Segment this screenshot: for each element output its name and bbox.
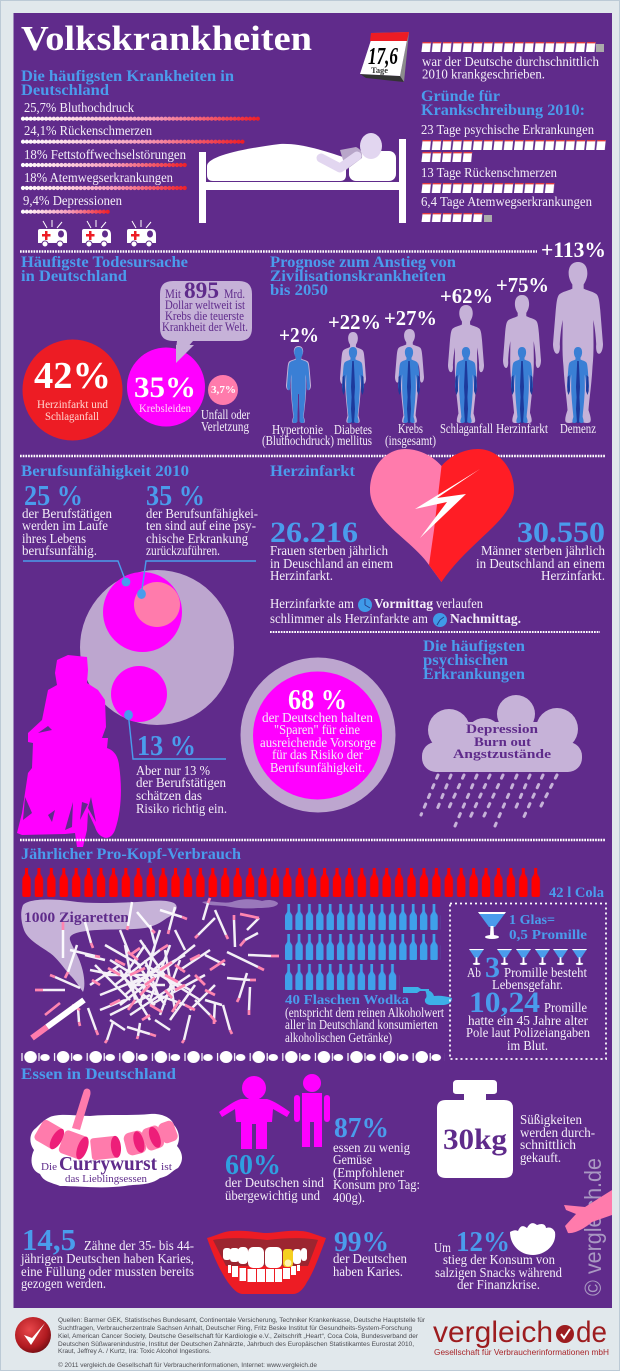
chart: vodka bottles: aller in Deutschland konsumierten [285, 1017, 438, 1032]
text: one glass: 0,5 Promille [509, 927, 587, 942]
text: sweets: Süßigkeiten [520, 1112, 582, 1127]
bar: Depressionen: 9,4% Depressionen [23, 193, 122, 208]
stat: 13 %: Aber nur 13 % [136, 763, 210, 778]
stat: 12% [434, 1226, 562, 1292]
stat: 35 % [146, 481, 258, 558]
circle: 3,7%: Unfall oder [201, 407, 250, 422]
figure: Krebs +27%: +27% [384, 306, 437, 330]
heading [21, 68, 234, 99]
panel: mental illness [421, 638, 582, 826]
text: 10,24 promille: Pole laut Polizeiangaben [466, 1025, 590, 1040]
panel: annual consumption [21, 846, 606, 1059]
stat: 60%: der Deutschen sind [225, 1175, 324, 1190]
stat: 87%: 87% [334, 1112, 389, 1144]
text: 3 promille: Promille besteht [504, 965, 587, 980]
text: morning and afternoon: verlaufen [436, 596, 483, 611]
text: sweets: schnittlich [520, 1137, 576, 1152]
stat: 60% [225, 1149, 324, 1203]
text: sick days: war der Deutsche durchschnittlich [422, 54, 599, 69]
icon: broken heart [370, 449, 514, 582]
icon: cloud: Depression [466, 721, 539, 736]
heading: reasons [421, 88, 585, 119]
stat: 12%: der Finanzkrise. [457, 1277, 540, 1292]
icon: calendar 17,6 Tage: Tage [371, 66, 388, 75]
stat: 14,5 teeth [20, 1222, 194, 1291]
figure: Diabetes +22%: +22% [328, 310, 381, 334]
icon: currywurst [30, 1088, 182, 1187]
circle: 68 %: "Sparen" für eine [274, 722, 360, 737]
stat: 30.550: in Deutschland an einem [476, 556, 606, 571]
circle: 35% [127, 345, 205, 426]
stat: 87%: (Empfohlener [333, 1165, 405, 1180]
figure: Schlaganfall +62%: +62% [440, 284, 493, 308]
text: sick days [422, 54, 599, 82]
circle: 68 %: für das Risiko der [272, 747, 364, 762]
stat: 13 %: der Berufstätigen [136, 775, 226, 790]
stat: 35 %: der Berufsunfähigkei- [146, 506, 258, 521]
circle: 68 % [240, 658, 396, 812]
icon: hand [564, 1190, 612, 1233]
icon: mouth [207, 1231, 326, 1294]
stat: 25 %: werden im Laufe [22, 518, 108, 533]
figure: Diabetes +22% [328, 310, 381, 448]
heading: Jährlicher Pro-Kopf-Verbrauch [21, 846, 241, 863]
logo: de [576, 1316, 607, 1349]
stat: 14,5 teeth: eine Füllung oder mussten bereits [21, 1264, 194, 1279]
reason: psychische Erkrankungen [421, 122, 606, 162]
stat: 35 %: zurückzuführen. [146, 543, 220, 558]
callout: 895 Mrd.: Krebs die teuerste [165, 309, 244, 323]
text: morning and afternoon: Vormittag [374, 596, 433, 611]
text: morning and afternoon: Herzinfarkte am [270, 596, 355, 611]
stat: 12%: 12% [456, 1226, 510, 1258]
stat: 25 %: ihres Lebens [22, 531, 86, 546]
text: 3 promille: Ab [467, 965, 481, 980]
panel: food in Germany [20, 1066, 612, 1296]
chart: nested ellipses [23, 561, 256, 759]
heading: Berufsunfähigkeit 2010 [21, 463, 189, 480]
icon: person in bed [199, 133, 406, 223]
icon: cloud: Angstzustände [453, 746, 551, 761]
icon: check seal [15, 1317, 51, 1353]
figure: Schlaganfall +62% [440, 284, 493, 436]
callout: 895 Mrd.: Mrd. [224, 287, 245, 301]
panel: forecast 2050 [262, 237, 606, 448]
stat: 87%: Konsum pro Tag: [333, 1177, 420, 1192]
stat: 14,5 teeth: 14,5 [22, 1222, 76, 1257]
stat: 26.216: Frauen sterben jährlich [270, 543, 388, 558]
heading: reasons: Krankschreibung 2010: [421, 102, 585, 119]
stat: 99%: der Deutschen [333, 1251, 407, 1266]
icon: large glass [478, 912, 506, 939]
panel: heart attack [270, 449, 606, 627]
chart: cola bottles [22, 868, 604, 901]
circle: 3,7% [201, 375, 250, 434]
text: morning and afternoon: schlimmer als Herzinfarkte am [270, 611, 429, 626]
icon: currywurst: das Lieblingsessen [65, 1173, 147, 1185]
heading: Erkrankungen [423, 666, 525, 683]
circle: 42%: Herzinfarkt und [37, 397, 108, 411]
callout: 895 Mrd.: 895 [184, 278, 219, 303]
chart: cola bottles: 42 l Cola [549, 885, 604, 901]
stat: 13 %: 13 % [137, 731, 196, 762]
stat: 25 %: berufsunfähig. [22, 543, 97, 558]
footer [15, 1316, 609, 1369]
bar: Fettstoffwechselstörungen: 18% Fettstoffwechselstörungen [24, 147, 186, 162]
icon: calendar 17,6 Tage: 17,6 [368, 44, 398, 70]
circle: 3,7%: 3,7% [211, 384, 236, 396]
sources: Kiel, American Cancer Society, Deutsche Gesellschaft für Kardiologie e.V., Zeitschrift „Heart“, Coca Cola, Bundesverband der [58, 1333, 419, 1340]
figure: Demenz +113%: Demenz [560, 421, 596, 436]
chart: vodka bottles: (entspricht dem reinen Alkoholwert [285, 1005, 444, 1020]
icon: cloud: Burn out [474, 734, 532, 749]
title: Volkskrankheiten [21, 19, 312, 58]
text: 3 promille: 3 [485, 951, 500, 984]
circle: 68 %: 68 % [288, 685, 347, 716]
heading [423, 638, 525, 683]
stat: 26.216: Herzinfarkt. [270, 568, 333, 583]
heading: Essen in Deutschland [21, 1066, 176, 1083]
heading: Die häufigsten [423, 638, 525, 655]
icon: rain [421, 775, 557, 826]
sources: Kraut, Jeffrey A. / Kurtz, Ira: Toxic Alcohol Ingestions. [58, 1348, 211, 1355]
logo: Gesellschaft für Verbraucherinformationen mbH [434, 1347, 609, 1357]
icon: cloud [422, 695, 582, 772]
icon: three ambulances [38, 220, 156, 247]
heading: in Deutschland [21, 268, 127, 285]
stat: 25 % [22, 481, 112, 558]
watermark: © vergleich.de [580, 1158, 606, 1296]
chart: vodka bottles: alkoholischen Getränke) [285, 1030, 392, 1045]
circle: 3,7%: Verletzung [201, 419, 249, 434]
reason: Atemwegserkrankungen [421, 194, 592, 222]
circle: 42% [22, 340, 122, 440]
heading: reasons: Gründe für [421, 88, 500, 105]
figure: Hypertonie +2% [262, 323, 334, 448]
text: 3 promille: Lebensgefahr. [492, 977, 563, 992]
stat: 30.550: Männer sterben jährlich [481, 543, 605, 558]
heading: psychischen [423, 652, 508, 669]
stat: 12%: Um [434, 1240, 451, 1255]
heading: Die häufigsten Krankheiten in [21, 68, 234, 85]
calendar row 17,6 [421, 42, 604, 52]
text: 3 promille [467, 951, 587, 992]
figure: Herzinfarkt +75%: +75% [496, 273, 549, 297]
callout: 895 Mrd.: Krankheit der Welt. [162, 320, 248, 334]
circle: 68 %: Berufsunfähigkeit. [270, 760, 365, 775]
callout: 895 Mrd.: Mit [165, 287, 181, 301]
figure: Krebs +27%: (insgesamt) [385, 433, 436, 448]
stat: 30.550 [476, 516, 606, 583]
figure: Herzinfarkt +75%: Herzinfarkt [496, 421, 548, 436]
stat: 30.550: 30.550 [517, 516, 605, 549]
logo: vergleich [433, 1316, 553, 1349]
sources: Deutschen Süßwarenindustrie, Institut der Deutschen Zahnärzte, Jahrbuch des Europäischen Statistikamtes Eurostat 2010, [58, 1341, 414, 1348]
stat: 87%: 400g). [333, 1190, 365, 1205]
heading [270, 254, 456, 299]
figure: Schlaganfall +62%: Schlaganfall [440, 421, 493, 436]
heading: Deutschland [21, 82, 109, 99]
heading: Prognose zum Anstieg von [270, 254, 456, 271]
icon: currywurst: ist [161, 1161, 172, 1173]
heading: Häufigste Todesursache [21, 254, 188, 271]
bar: Bluthochdruck: 25,7% Bluthochdruck [24, 100, 134, 115]
heading: bis 2050 [270, 282, 328, 299]
icon: currywurst: Currywurst [59, 1153, 157, 1175]
bar: Rückenschmerzen: 24,1% Rückenschmerzen [24, 123, 152, 138]
stat: 26.216 [270, 516, 394, 583]
stat: 30.550: Herzinfarkt. [541, 568, 605, 583]
stat: 12%: salzigen Snacks während [435, 1265, 562, 1280]
reason: psychische Erkrankungen: 23 Tage psychische Erkrankungen [421, 122, 594, 137]
figure: Demenz +113% [541, 237, 606, 436]
figure: Diabetes +22%: Diabetes [334, 422, 372, 437]
figure: Herzinfarkt +75% [496, 273, 549, 436]
figure: Hypertonie +2%: +2% [279, 323, 319, 347]
figure: Hypertonie +2%: Hypertonie [272, 422, 323, 437]
figure: Hypertonie +2%: (Bluthochdruck) [262, 433, 334, 448]
icon: overweight person [219, 1076, 290, 1149]
stat: 13 % [136, 731, 227, 816]
stat: 87%: Gemüse [333, 1152, 372, 1167]
bar: Atemwegserkrankungen: 18% Atemwegserkrankungen [24, 170, 173, 185]
figure: Diabetes +22%: mellitus [337, 433, 372, 448]
figure: Demenz +113%: +113% [541, 237, 606, 262]
stat: 87%: essen zu wenig [333, 1140, 410, 1155]
text: 10,24 promille: 10,24 [469, 986, 540, 1019]
text: 10,24 promille: hatte ein 45 Jahre alter [468, 1013, 589, 1028]
cigarettes and smoke: 1000 Zigaretten [24, 910, 130, 926]
panel: sick days [421, 42, 606, 222]
text: 10,24 promille [466, 986, 590, 1053]
text: sweets: werden durch- [520, 1125, 595, 1140]
stat: 87% [333, 1112, 420, 1205]
stat: 14,5 teeth: Zähne der 35- bis 44- [84, 1238, 194, 1253]
text: morning and afternoon [270, 596, 521, 627]
reason: Atemwegserkrankungen: 6,4 Tage Atemwegserkrankungen [421, 194, 592, 209]
heading: Zivilisationskrankheiten [270, 268, 446, 285]
icon: 30kg weight: 30kg [443, 1123, 507, 1156]
reason: Rückenschmerzen [421, 165, 557, 193]
sources: © 2011 vergleich.de Gesellschaft für Verbraucherinformationen, Internet: www.vergleich.de [58, 1361, 317, 1369]
logo [433, 1316, 609, 1357]
callout: 895 Mrd.: Dollar weltweit ist [165, 298, 245, 312]
divider: plates and cupcakes [21, 1050, 445, 1064]
stat: 26.216: 26.216 [270, 516, 358, 549]
figure: Krebs +27% [384, 306, 437, 448]
stat: 60%: übergewichtig und [225, 1188, 320, 1203]
text: 10,24 promille: Promille [544, 1000, 587, 1015]
icon: person in wheelchair [17, 655, 121, 847]
heading: Herzinfarkt [270, 463, 356, 480]
icon: 30kg weight [437, 1080, 513, 1178]
figure: Krebs +27%: Krebs [398, 421, 423, 436]
text: sweets: gekauft. [520, 1150, 561, 1165]
text: 10,24 promille: im Blut. [507, 1038, 548, 1053]
text: one glass: 1 Glas= [509, 912, 555, 927]
chart: vodka bottles: 40 Flaschen Wodka [285, 993, 409, 1008]
chart: vodka bottles [285, 904, 452, 1045]
box: alcohol promille [450, 904, 606, 1059]
stat: 14,5 teeth: jährigen Deutschen haben Karies, [20, 1251, 194, 1266]
stat: 25 %: 25 % [24, 481, 83, 512]
stat: 12%: stieg der Konsum von [443, 1252, 555, 1267]
icon: snack bowl [510, 1223, 555, 1255]
text: sweets [520, 1112, 595, 1165]
circle: 42%: 42% [34, 355, 111, 397]
icon: currywurst: Die [41, 1161, 57, 1173]
text: one glass [509, 912, 587, 942]
stat: 35 %: 35 % [146, 481, 205, 512]
stat: 13 %: Risiko richtig ein. [136, 801, 227, 816]
heading [21, 254, 188, 285]
circle: 35%: Krebsleiden [139, 401, 191, 415]
circle: 42%: Schlaganfall [45, 409, 100, 423]
stat: 99% [333, 1226, 407, 1279]
panel: most common diseases [21, 68, 261, 212]
icon: six small glasses [469, 949, 587, 965]
circle: 35%: 35% [134, 371, 196, 404]
stat: 26.216: in Deuschland an einem [270, 556, 394, 571]
circle: 68 %: ausreichende Vorsorge [260, 735, 376, 750]
stat: 99%: haben Karies. [333, 1264, 403, 1279]
panel: occupational disability [17, 463, 396, 847]
sources: Quellen: Barmer GEK, Statistisches Bundesamt, Continentale Versicherung, Techniker Krankenkasse, Deutsche Hauptstelle für [58, 1317, 426, 1324]
callout: 895 Mrd. [160, 278, 252, 363]
panel: causes of death [21, 254, 252, 440]
circle: 68 %: der Deutschen halten [262, 710, 373, 725]
sources [58, 1317, 426, 1369]
stat: 25 %: der Berufstätigen [22, 506, 112, 521]
text: morning and afternoon: Nachmittag. [450, 611, 521, 626]
text: sick days: 2010 krankgeschrieben. [422, 66, 545, 82]
stat: 14,5 teeth: gezogen werden. [21, 1276, 106, 1291]
stat: 13 %: schätzen das [136, 788, 202, 803]
stat: 99%: 99% [334, 1226, 389, 1258]
stat: 60%: 60% [225, 1149, 281, 1181]
icon: calendar 17,6 Tage [360, 32, 409, 82]
reason: Rückenschmerzen: 13 Tage Rückenschmerzen [421, 165, 557, 180]
stat: 35 %: chische Erkrankung [146, 531, 248, 546]
stat: 35 %: ten sind auf eine psy- [146, 518, 256, 533]
sources: Suchtfragen, Verbraucherzentrale Sachsen Anhalt, Deutscher Ring, Fritz Beske Institut für Gesundheits-System-Forschung [58, 1325, 412, 1332]
cigarettes and smoke [21, 898, 279, 1043]
icon: normal person [294, 1074, 330, 1147]
